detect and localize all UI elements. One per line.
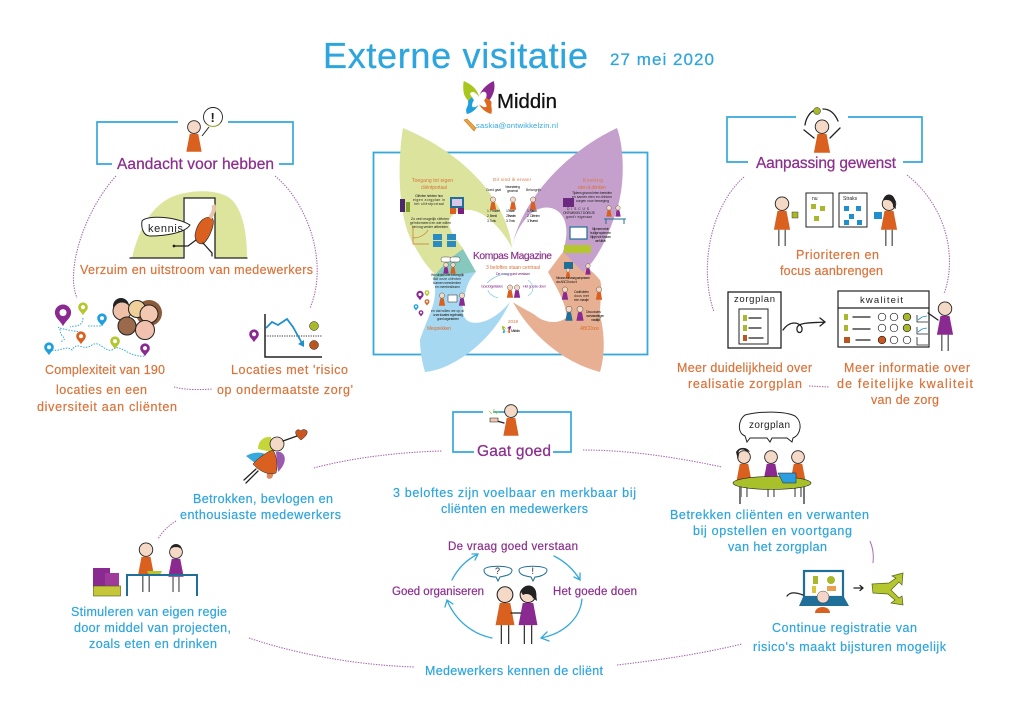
salmon wing text: Discussies xyxy=(586,310,601,314)
middle text: dit vind ik ervan: 3. Trots xyxy=(506,219,515,223)
illustration: meeting xyxy=(733,412,811,504)
icon: juggling person xyxy=(804,108,840,153)
caption: focus aanbrengen xyxy=(780,264,883,278)
purple wing text: goed'r eigenaar xyxy=(566,215,593,219)
centre: promises: 3 beloftes staan centraal xyxy=(486,265,540,271)
cycle: three promises: ? xyxy=(495,566,500,576)
text: beloftes: 3 beloftes zijn voelbaar en merkbaar bij xyxy=(393,486,636,500)
middle text: dit vind ik ervan: 2. Cliënten xyxy=(527,214,540,218)
caption: de feitelijke kwaliteit xyxy=(837,377,974,391)
middle text: dit vind ik ervan: gewenst xyxy=(507,189,518,193)
caption xyxy=(180,492,341,522)
green wing text: cliëntportaal xyxy=(421,185,447,191)
middle text: dit vind ik ervan: Verandering xyxy=(505,185,520,189)
blue wing text: en meebeslissen xyxy=(435,285,460,289)
caption xyxy=(677,361,812,391)
blue wing text: onze locaties regelmatig xyxy=(433,313,463,317)
caption: realisatie zorgplan xyxy=(688,377,802,391)
frame xyxy=(374,152,648,354)
cycle: three promises: ! xyxy=(532,566,534,576)
heading: Gaat goed xyxy=(477,443,551,460)
panel: Kompas Magazine xyxy=(374,128,648,372)
caption: risico's maakt bijsturen mogelijk xyxy=(753,640,947,654)
salmon wing text: een maatje xyxy=(574,298,589,302)
cycle: three promises xyxy=(392,541,637,644)
illustration: sticky boards: Straks xyxy=(843,196,858,202)
middle text: dit vind ik ervan: 3. Trots xyxy=(487,219,496,223)
magazine title: Kompas Magazine xyxy=(473,251,552,262)
caption: van de zorg xyxy=(871,393,939,407)
title: Externe visitatie xyxy=(323,35,588,76)
icon: diverging arrows xyxy=(872,573,903,605)
panel: zorgplan meeting xyxy=(670,412,873,563)
centre: promises xyxy=(481,265,546,333)
email: saskia@ontwikkelzin.nl xyxy=(476,121,558,130)
caption xyxy=(37,363,177,414)
purple wing text: Kijk je in de Keuken xyxy=(590,235,611,239)
illustration: kwaliteit board: kwaliteit xyxy=(860,295,903,306)
caption: enthousiaste medewerkers xyxy=(180,508,341,522)
salmon wing text: maaltijd xyxy=(591,318,600,322)
caption: Meer duidelijkheid over xyxy=(677,361,812,375)
cycle: three promises: De vraag goed verstaan xyxy=(448,541,578,553)
bracket xyxy=(97,122,293,164)
caption: Stimuleren van eigen regie xyxy=(71,605,227,619)
purple wing text: eten & drinken xyxy=(578,185,606,191)
middle text: dit vind ik ervan: Dit vind ik ervan! xyxy=(493,177,531,182)
salmon wing text: ABCDoos xyxy=(580,326,600,332)
salmon wing text xyxy=(556,262,604,332)
caption: Prioriteren en xyxy=(796,248,879,262)
illustration: table and persons xyxy=(93,543,197,596)
illustration: zorgplan: zorgplan xyxy=(734,294,775,305)
green wing text: Toegang tot eigen xyxy=(412,178,453,184)
middle text: dit vind ik ervan: 2. Beeld xyxy=(487,214,497,218)
illustration: locations and faces xyxy=(44,298,162,356)
blue wing text xyxy=(414,257,465,332)
caption: Continue registratie van xyxy=(772,621,917,635)
centre: promises: De vraag goed verstaan xyxy=(496,272,530,276)
purple wing text: ONTWIKKELT DOEKJE xyxy=(563,211,596,215)
panel: Aanpassing gewenst xyxy=(677,108,974,407)
caption: Betrekken cliënten en verwanten xyxy=(670,508,869,522)
centre: promises: Goed organiseren xyxy=(481,284,503,288)
caption: op ondermaatste zorg' xyxy=(217,383,353,397)
cycle: three promises: Het goede doen xyxy=(553,586,637,598)
caption: locaties en een xyxy=(56,383,147,397)
illustration: zorgplan xyxy=(728,292,781,348)
purple wing text: van Middin xyxy=(595,239,606,243)
logo: Middin xyxy=(463,81,557,114)
green wing text: Cliënten hebben hun xyxy=(415,194,443,198)
heading: Aanpassing gewenst xyxy=(756,155,897,172)
cycle: three promises: Goed organiseren xyxy=(392,586,484,598)
illustration: meeting: zorgplan xyxy=(749,420,790,431)
purple wing text: DISCUS xyxy=(567,207,590,211)
centre: promises: Middin xyxy=(511,328,520,333)
date: 27 mei 2020 xyxy=(610,50,714,69)
centre: promises: Het goede doen xyxy=(523,284,546,288)
purple wing text: Kijk mee met de xyxy=(592,227,609,231)
purple wing text xyxy=(563,178,626,253)
green wing text: het cliëntportaal xyxy=(414,202,444,206)
bracket xyxy=(453,412,571,452)
caption: zoals eten en drinken xyxy=(89,637,217,651)
caption xyxy=(753,621,947,654)
illustration: sticky boards xyxy=(774,193,897,246)
icon: laptop xyxy=(787,571,849,613)
caption: van het zorgplan xyxy=(728,540,827,554)
green wing text: het nog verder uitbreiden xyxy=(412,225,448,229)
chart: risk xyxy=(249,314,322,357)
middle text: dit vind ik ervan: Goed gaat xyxy=(486,188,501,192)
blue wing text: dat onze cliënten xyxy=(433,277,461,281)
middle text: dit vind ik ervan: 1. Positief xyxy=(487,209,500,213)
logo: Middin: Middin xyxy=(497,91,557,113)
icon: person with balloon xyxy=(186,108,222,152)
caption: door middel van projecten, xyxy=(74,621,231,635)
panel: fairy xyxy=(158,430,341,539)
purple wing text: Koeling xyxy=(583,178,603,184)
caption: diversiteit aan cliënten xyxy=(37,400,177,414)
salmon wing text: voor verzoekingen xyxy=(586,314,604,318)
caption: bij opstellen en voortgang xyxy=(693,524,852,538)
heading: Aandacht voor hebben xyxy=(117,156,274,173)
caption xyxy=(670,508,869,554)
middle text: dit vind ik ervan: 3. Tevreed xyxy=(527,219,538,223)
caption: Verzuim en uitstroom van medewerkers xyxy=(80,263,313,277)
purple wing text: en samen eten en drinken xyxy=(572,195,612,199)
purple wing text: huidige systemen xyxy=(590,231,611,235)
salmon wing text: Cadrit delen xyxy=(574,290,589,294)
text: beloftes: cliënten en medewerkers xyxy=(441,502,588,516)
salmon wing text: via ABCDoos.nl xyxy=(556,280,577,284)
middle text: dit vind ik ervan: 2. Tevreden xyxy=(506,214,516,218)
blue wing text: We vinden het belangrijk xyxy=(431,273,464,277)
illustration: person leaving with knowledge: kennis xyxy=(148,223,184,235)
blue wing text: en dat willen we op al xyxy=(431,309,464,313)
panel: continue registratie xyxy=(753,571,947,654)
icon: person thumbs up xyxy=(489,405,519,436)
caption xyxy=(71,605,231,651)
caption: Locaties met 'risico xyxy=(231,363,348,377)
icon: flying fairy xyxy=(244,430,307,483)
icon: person with balloon: ! xyxy=(210,110,215,125)
illustration: kwaliteit board xyxy=(838,291,953,351)
caption: Meer informatie over xyxy=(844,361,970,375)
middle text: dit vind ik ervan: 1. Tevree xyxy=(506,209,515,213)
text: beloftes xyxy=(393,486,636,516)
middle text: dit vind ik ervan: Belangrijk xyxy=(526,188,541,192)
blue wing text: kunnen meedenken xyxy=(433,281,461,285)
panel: Aandacht voor hebben xyxy=(37,108,353,414)
caption xyxy=(837,361,974,407)
caption: Betrokken, bevlogen en xyxy=(193,492,333,506)
purple wing text: Tijdens gezond eten bereiden xyxy=(572,191,612,195)
caption xyxy=(217,363,353,397)
bracket xyxy=(727,117,922,162)
centre: promises: 2019 xyxy=(508,319,518,324)
butterfly wings xyxy=(400,128,623,372)
green wing text: Zo veel mogelijk cliënten xyxy=(411,217,449,221)
caption: Complexiteit van 190 xyxy=(45,363,165,377)
illustration: person leaving with knowledge xyxy=(130,191,247,258)
green wing text: eigen zorgplan in xyxy=(413,198,445,202)
salmon wing text: Nieuwe aanvraag aanpassen xyxy=(556,276,590,280)
caption xyxy=(780,248,883,278)
middle text: dit vind ik ervan: 1. Risico xyxy=(527,209,537,213)
blue wing text: goed organiseren xyxy=(437,317,459,321)
blue wing text: Mesprekken xyxy=(427,326,451,332)
green wing text xyxy=(400,178,464,247)
panel: cooking together xyxy=(71,543,231,651)
arrow xyxy=(854,586,863,590)
illustration: sticky boards: nu xyxy=(812,196,818,202)
icon: pencil xyxy=(464,119,476,131)
text: medewerkers kennen: Medewerkers kennen de cliënt xyxy=(425,664,604,678)
arrow xyxy=(783,318,825,332)
green wing text: geïnformeerd en wie willen xyxy=(410,221,451,225)
salmon wing text: doos met xyxy=(574,294,589,298)
panel: Gaat goed xyxy=(249,405,742,678)
purple wing text: zorgen voor beweging xyxy=(576,199,609,203)
middle text: dit vind ik ervan xyxy=(486,177,541,223)
